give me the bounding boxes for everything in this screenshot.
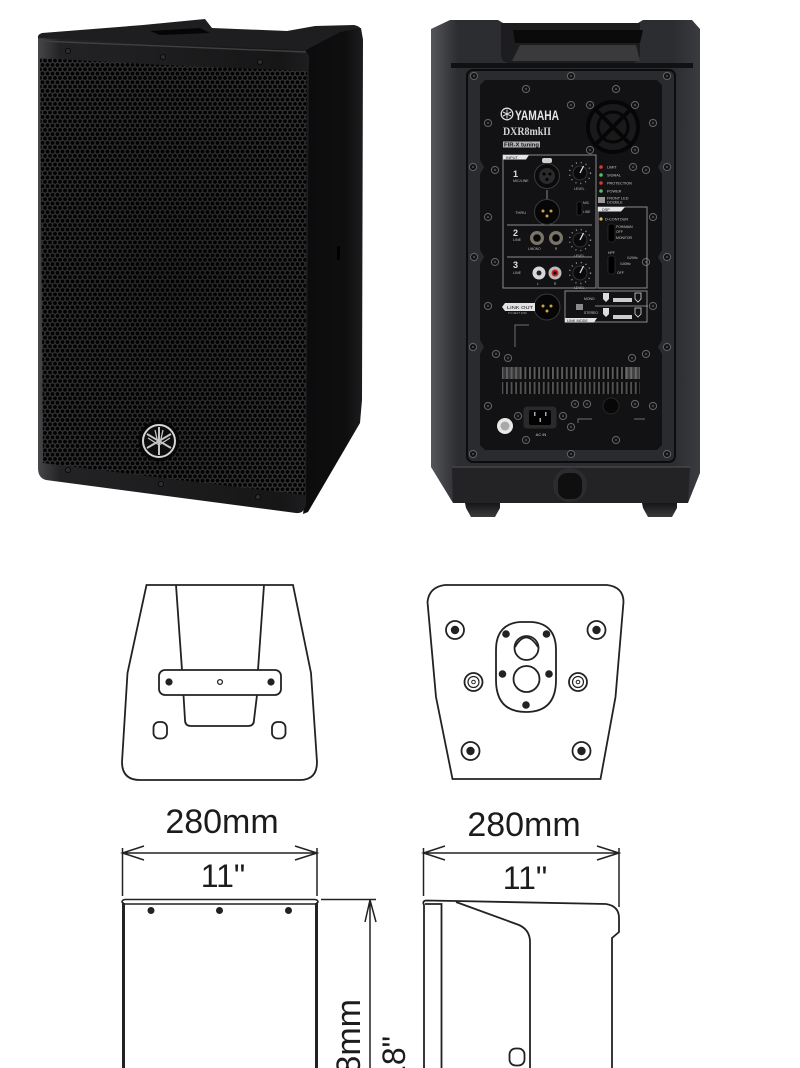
XLR connectors: [534, 158, 560, 320]
inch label: front 11": 11": [201, 858, 245, 894]
input section: R: [554, 282, 557, 286]
DSP section: D-CONTOUR: [605, 218, 628, 222]
panel: rear view of speaker: [431, 20, 700, 517]
input section: LINE: [513, 271, 522, 275]
input section: LEVEL: [574, 286, 585, 290]
link mode section: [565, 291, 648, 323]
input section: 1: [513, 169, 518, 179]
DSP section: /100Hz: [620, 262, 631, 266]
FIR-X tuning badge: [503, 142, 540, 148]
side nuts: [464, 673, 587, 691]
DSP section: FOH/MAIN: [616, 225, 633, 229]
heat sink vents: [502, 325, 645, 423]
input section: MIC: [583, 201, 590, 205]
speaker front baffle: [38, 38, 309, 513]
speaker mesh grille: [40, 58, 307, 495]
width label: side 280mm: 280mm: [467, 806, 581, 844]
status LEDs and labels: LIMIT: [607, 166, 617, 170]
input section: R: [555, 247, 558, 251]
speaker side panel: [303, 28, 363, 514]
input section: LINE: [583, 210, 591, 214]
side handle recess: [337, 246, 340, 260]
front cabinet outline: [124, 903, 316, 1068]
rear metal plate: [467, 70, 675, 462]
width dimension arrow: front: [122, 846, 317, 896]
DSP section: MONITOR: [616, 236, 632, 240]
input section: LEVEL: [574, 187, 585, 191]
speaker top surface with handle: [38, 19, 363, 58]
side slanted profile: [456, 902, 530, 1068]
input section: L/MONO: [528, 247, 541, 251]
AC power inlet and switch: [497, 398, 639, 437]
side inner wall: [425, 904, 442, 1068]
top outline: [122, 585, 317, 780]
input section: [503, 155, 596, 290]
top bracket: [159, 670, 281, 695]
Yamaha logo: YAMAHA: [515, 107, 559, 123]
status LEDs and labels: SIGNAL: [607, 174, 621, 178]
input section: LINE: [513, 238, 522, 242]
status LEDs and labels: PROTECTION: [607, 182, 632, 186]
link mode section: LINK MODE: [567, 319, 588, 323]
DSP section: DSP: [602, 208, 610, 212]
side cabinet outline: [423, 900, 619, 1068]
FIR-X tuning badge: FIR-X tuning: [504, 142, 539, 148]
panel: front view of speaker: [38, 19, 363, 514]
icon: Yamaha tuning fork badge: [138, 420, 180, 462]
width dimension arrow: side: [424, 846, 619, 907]
bottom bar with grip: [452, 467, 690, 503]
Yamaha logo: [501, 107, 559, 123]
handle recess outline: [176, 585, 264, 726]
rubber feet: [465, 503, 677, 517]
link out label: TO NEXT DXR: [508, 311, 527, 315]
cooling fan: [588, 102, 638, 152]
DSP section: OFF: [616, 230, 623, 234]
input section: INPUT: [506, 155, 519, 160]
link out label: [502, 303, 535, 315]
panel: front elevation line drawing: [122, 900, 318, 1068]
status LEDs and labels: POWER: [607, 190, 622, 194]
mount screws: [446, 621, 606, 760]
rear slots: [154, 722, 286, 738]
input section: MIC/LINE: [513, 179, 529, 183]
rear cabinet body: [431, 20, 700, 503]
width label: front 280mm: 280mm: [165, 803, 279, 841]
status LEDs and labels: FRONT LED: [607, 196, 629, 200]
inch label: side 11": 11": [503, 860, 547, 896]
status LEDs and labels: DOUBLE: [607, 200, 623, 204]
link mode section: STEREO: [584, 311, 598, 315]
input section: 3: [513, 260, 518, 270]
level knobs: [570, 162, 590, 284]
DSP section: /120Hz: [627, 256, 638, 260]
jack and RCA connectors: [530, 231, 563, 280]
panel: bottom view line drawing: [428, 585, 624, 779]
status LEDs and labels: [598, 165, 632, 204]
input section: 2: [513, 228, 518, 238]
pole socket plate: [496, 622, 556, 712]
side slot: [510, 1048, 524, 1066]
panel: side elevation line drawing: [423, 900, 619, 1068]
bottom outline: [428, 585, 624, 779]
model name: DXR8mkII: [503, 124, 551, 138]
panel: top view line drawing: [122, 585, 317, 780]
height dimension arrow: [321, 900, 376, 1068]
bracket screws: [165, 678, 275, 686]
input section: L: [537, 282, 539, 286]
DSP section: OFF: [617, 271, 624, 275]
carry handle recess: [451, 23, 693, 68]
AC power inlet and switch: AC IN: [536, 432, 546, 437]
link mode section: MONO: [584, 297, 595, 301]
plate screws: [469, 72, 671, 458]
front grille screws: [65, 48, 263, 500]
input section: THRU: [515, 210, 526, 215]
link out label: LINK OUT: [507, 305, 533, 310]
DSP section: HPF: [608, 251, 615, 255]
black control panel: [480, 80, 662, 450]
DSP section: [598, 207, 647, 288]
input section: LEVEL: [574, 254, 585, 258]
front top screws: [148, 907, 292, 914]
